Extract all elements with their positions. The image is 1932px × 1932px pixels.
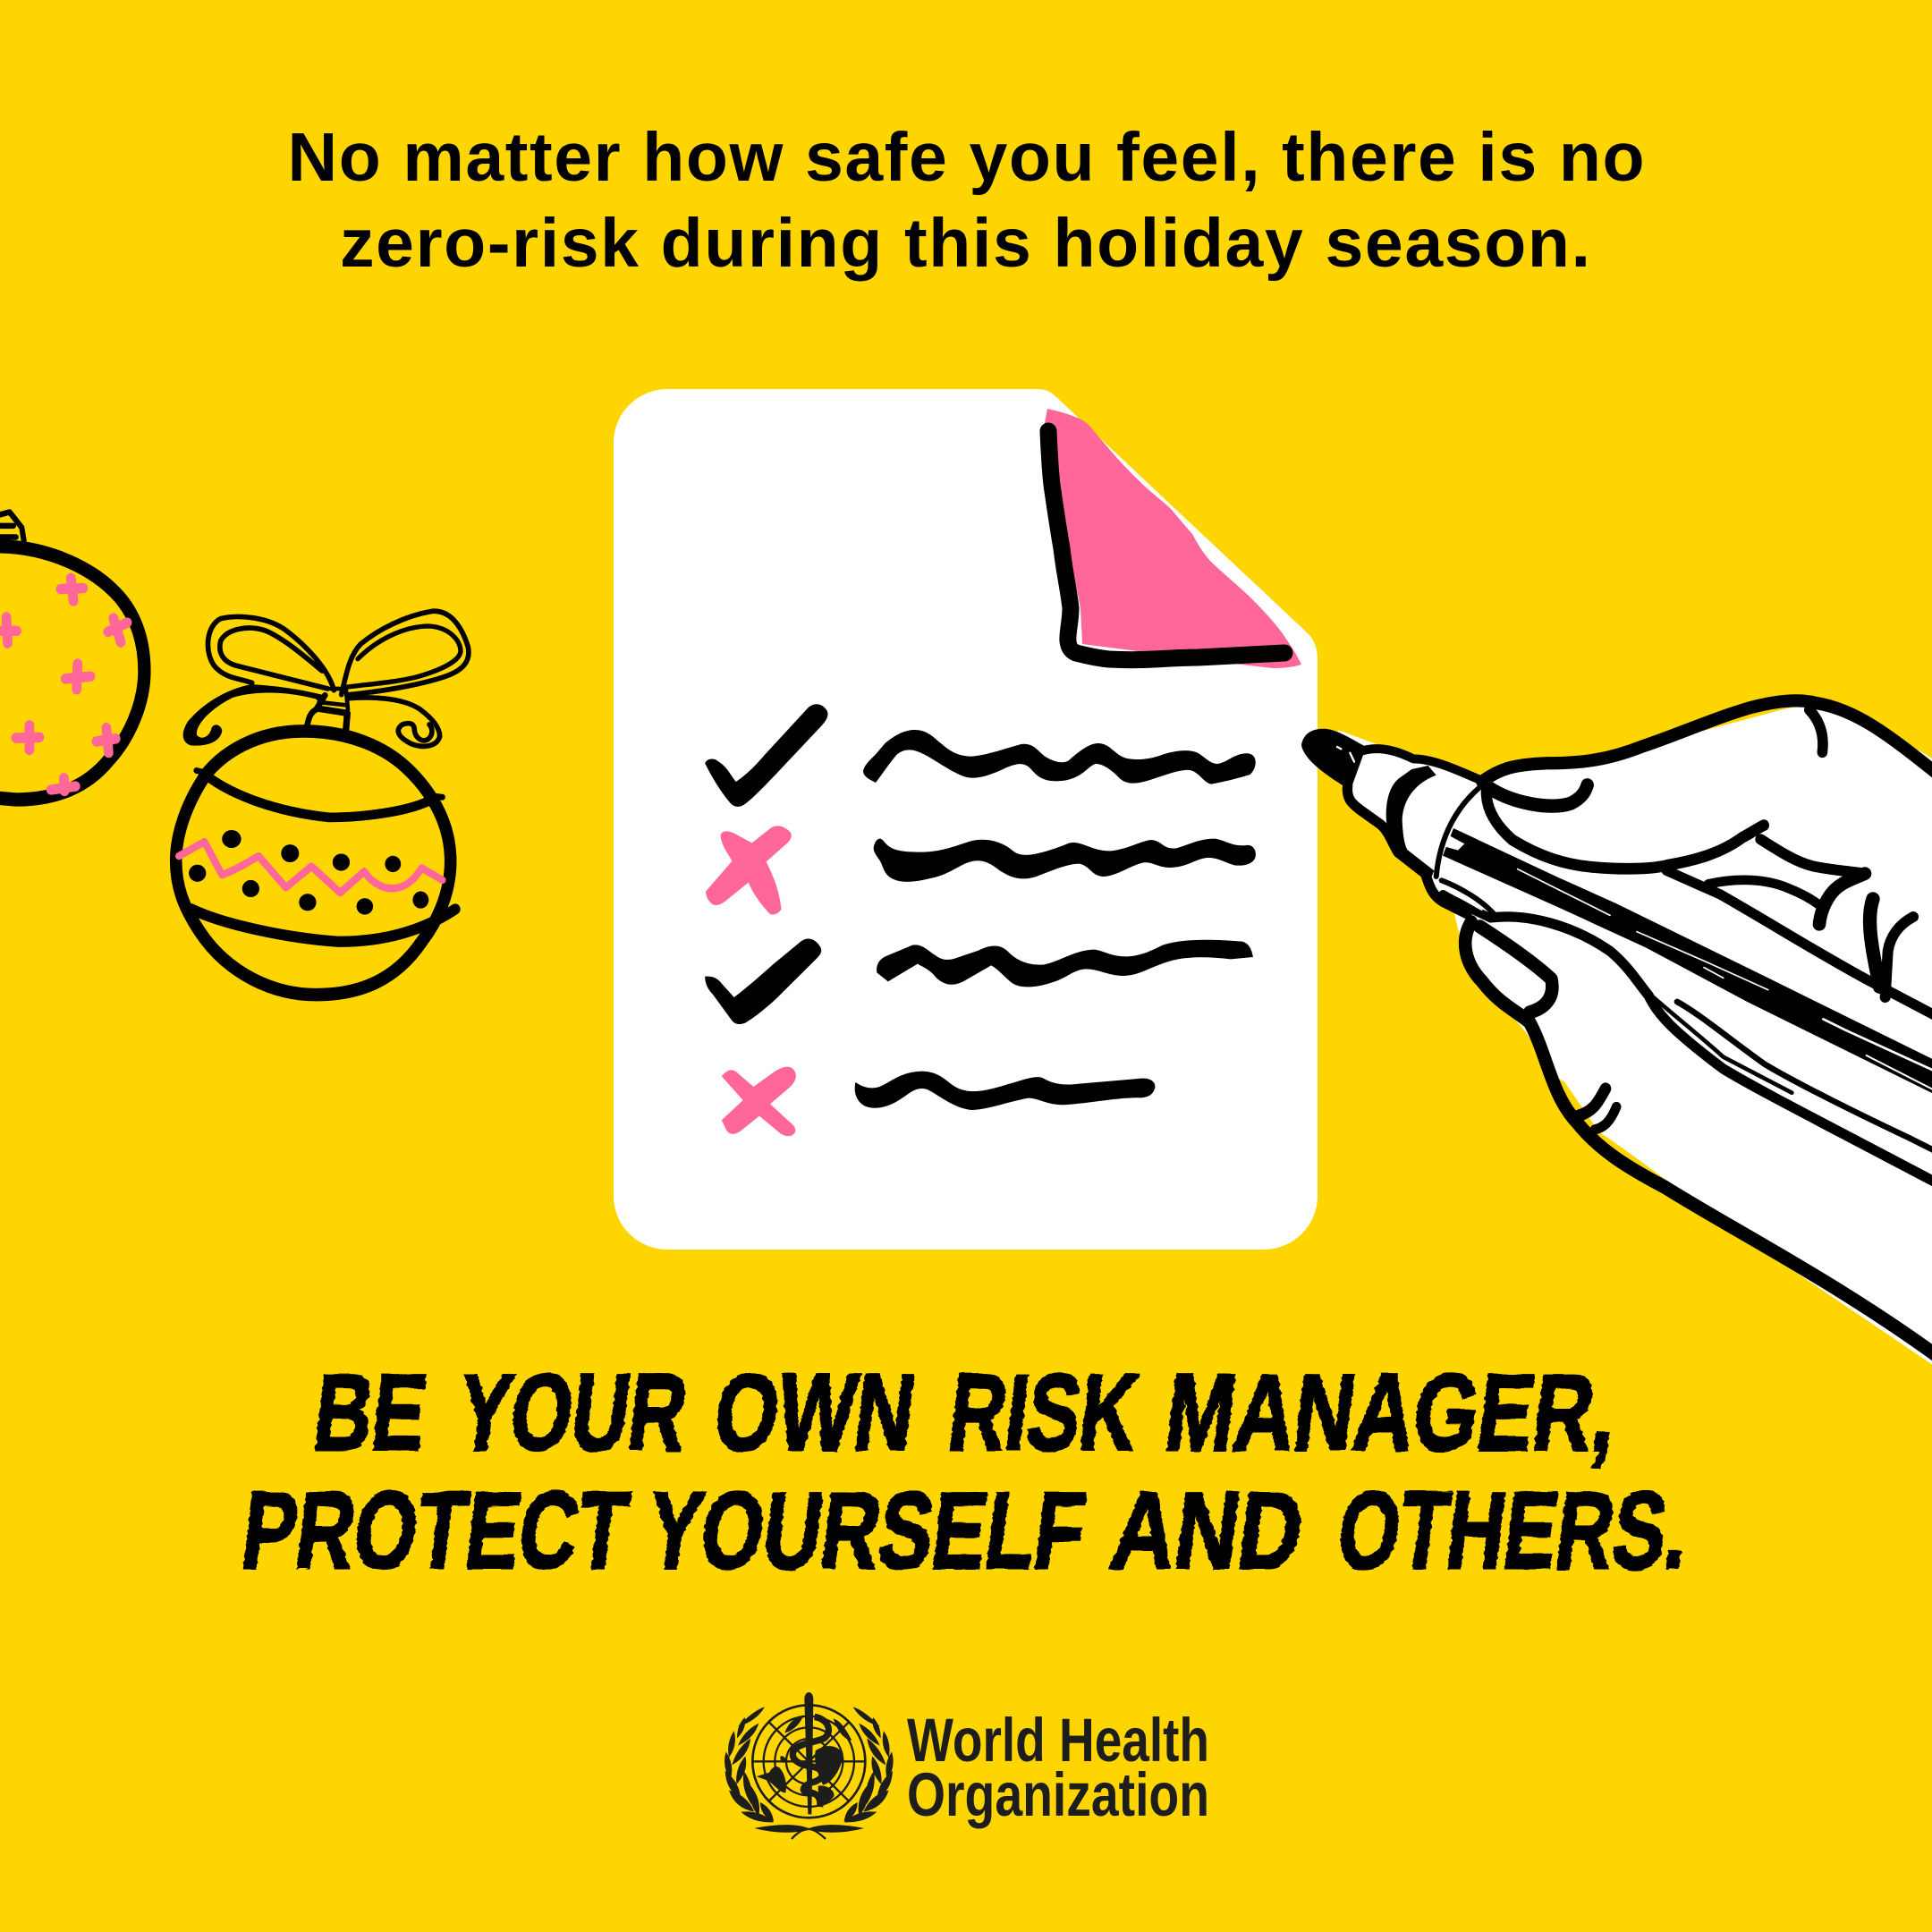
paper sheet [614,389,1318,1250]
slogan: AND [1106,1469,1310,1591]
slogan: YOUR [452,1351,694,1473]
bauble body [176,731,455,995]
slogan: OTHERS. [1332,1469,1696,1591]
laurel wreath right [844,1707,894,1822]
marker head [1301,729,1494,919]
wordmark [907,1706,1209,1829]
globe rings [752,1705,865,1818]
cross mark 1 [706,826,792,915]
slogan: OWN [708,1351,922,1473]
bow [183,611,469,746]
logo: World Health Organization [724,1692,1209,1839]
icon: left bauble [0,513,144,800]
slogan: MANAGER, [1159,1351,1624,1473]
wordmark: World Health [907,1706,1209,1775]
check mark 2 [705,938,821,1024]
wordmark: Organization [907,1760,1209,1829]
cross mark 2 [722,1067,796,1136]
bauble outline [0,547,144,800]
text scribble 2 [874,839,1256,882]
continents [757,1719,852,1806]
page fold [1045,409,1301,668]
headline: No matter how safe you feel, there is no [288,119,1644,196]
thumb [1465,922,1932,1362]
panel: checklist document [614,389,1318,1250]
serpent [784,1715,803,1733]
hand fill [1304,705,1932,1374]
headline [288,119,1644,282]
staff [804,1692,813,1814]
icon: right bauble with bow [176,611,469,995]
text scribble 1 [863,730,1256,784]
pink crosses [0,578,127,791]
bauble cap [0,513,24,541]
illustration: hand holding a marker [1301,700,1932,1374]
slogan: BE [308,1351,434,1473]
ribbon [754,1825,864,1833]
slogan: RISK [943,1351,1145,1473]
middle fingers and barrel band [1443,828,1932,1210]
text scribble 3 [877,940,1253,987]
laurel wreath left [724,1707,774,1822]
checklist marks [705,704,1256,1136]
index finger [1482,700,1932,782]
check mark 1 [705,704,827,807]
headline: zero-risk during this holiday season. [340,205,1590,282]
emblem [724,1692,894,1839]
slogan [236,1351,1696,1591]
slogan: YOURSELF [641,1469,1092,1591]
slogan: PROTECT [236,1469,635,1591]
text scribble 4 [855,1072,1155,1110]
